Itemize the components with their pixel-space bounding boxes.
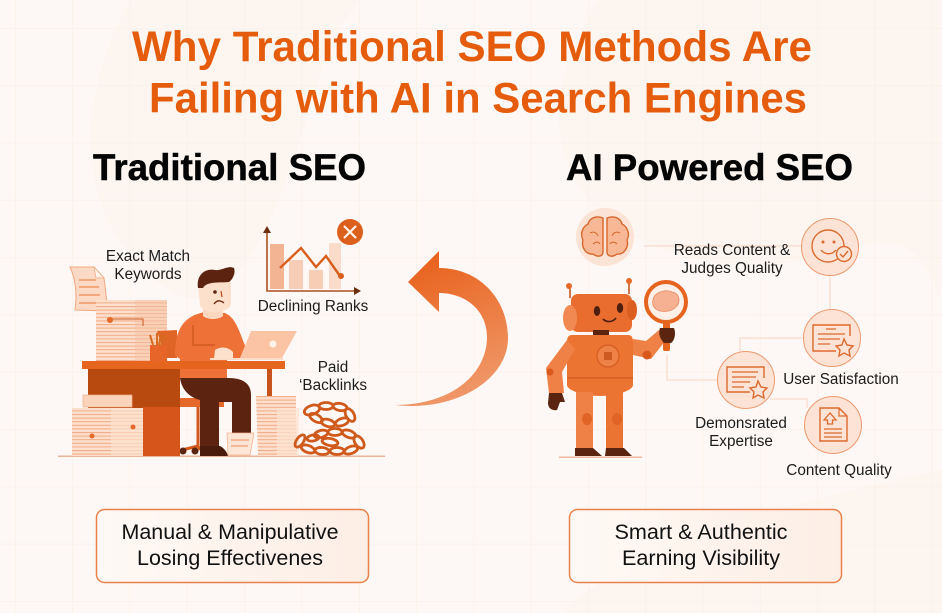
left arm — [546, 340, 575, 393]
chair back — [157, 330, 177, 358]
desk — [82, 361, 285, 456]
callout: Manual & Manipulative: Manual & Manipulative — [122, 520, 338, 544]
icon: brain in circle — [576, 208, 634, 266]
callout: Smart & Authentic: Earning Visibility — [622, 546, 780, 570]
label: Exact Match Keywords — [106, 248, 190, 283]
magnifier — [663, 322, 670, 351]
hair — [198, 267, 235, 288]
right hand — [659, 328, 675, 343]
panel: traditional SEO illustration — [58, 219, 385, 457]
label: Reads Content & Judges Quality — [674, 242, 790, 277]
heading: AI Powered SEO: AI Powered SEO — [566, 147, 853, 188]
right arm — [633, 330, 666, 359]
heading: Traditional SEO: Traditional SEO — [93, 147, 366, 188]
neck — [593, 330, 609, 338]
icon: certificate left — [718, 352, 774, 408]
icon: smile with check — [802, 218, 858, 276]
callout: Manual & Manipulative — [96, 510, 368, 582]
label: Paid Backlinks — [299, 359, 367, 394]
icon: document upload — [804, 396, 862, 454]
icon: loose paper note — [70, 267, 108, 311]
callout: Smart & Authentic: Smart & Authentic — [614, 520, 788, 544]
label: Demonsrated Expertise: Expertise — [709, 433, 773, 450]
shoe — [200, 446, 228, 456]
icon: chain — [293, 402, 366, 456]
label: Declining Ranks: Declining Ranks — [258, 298, 369, 315]
chart: declining ranks — [263, 226, 361, 295]
legs — [576, 392, 593, 449]
left hand — [548, 393, 565, 410]
icon: top paper stack — [96, 300, 167, 361]
body — [567, 335, 633, 396]
label: Exact Match Keywords: Keywords — [114, 266, 182, 283]
neck and head — [203, 300, 223, 319]
torso — [175, 312, 247, 378]
panel: AI powered SEO illustration — [546, 208, 899, 479]
icon: X badge — [337, 219, 363, 245]
person — [175, 267, 251, 456]
callout: Smart & Authentic — [570, 510, 842, 582]
head — [571, 294, 632, 332]
label: Reads Content & Judges Quality: Reads Content & — [674, 242, 790, 259]
label: Demonsrated Expertise — [695, 415, 787, 450]
label: Exact Match Keywords: Exact Match — [106, 248, 190, 265]
title: Failing with AI in Search Engines — [149, 74, 807, 122]
callout: Manual & Manipulative: Losing Effectivenes — [137, 546, 323, 570]
title — [132, 23, 812, 122]
chair seat — [180, 398, 224, 407]
icon: lower left paper stack — [72, 395, 143, 456]
label: User Satisfaction: User Satisfaction — [783, 371, 899, 388]
robot — [546, 278, 686, 458]
icon: pen cup — [150, 333, 167, 361]
icon: lower right paper stack — [227, 396, 299, 456]
label: Reads Content & Judges Quality: Judges Quality — [681, 260, 783, 277]
icon: laptop — [210, 331, 297, 360]
icon: certificate top — [804, 310, 860, 366]
ground line — [58, 456, 385, 457]
label: Paid Backlinks: ‘Backlinks — [299, 377, 367, 394]
face — [213, 290, 217, 294]
label: Paid Backlinks: Paid — [318, 359, 348, 376]
label: Demonsrated Expertise: Demonsrated — [695, 415, 787, 432]
feet — [575, 448, 602, 456]
arrow: curved pointing left — [395, 251, 508, 406]
connector lines — [644, 246, 830, 408]
antennas — [570, 281, 629, 298]
trousers — [180, 378, 251, 446]
ground — [559, 456, 642, 458]
label: Content Quality: Content Quality — [786, 462, 892, 479]
title: Why Traditional SEO Methods Are — [132, 23, 812, 71]
